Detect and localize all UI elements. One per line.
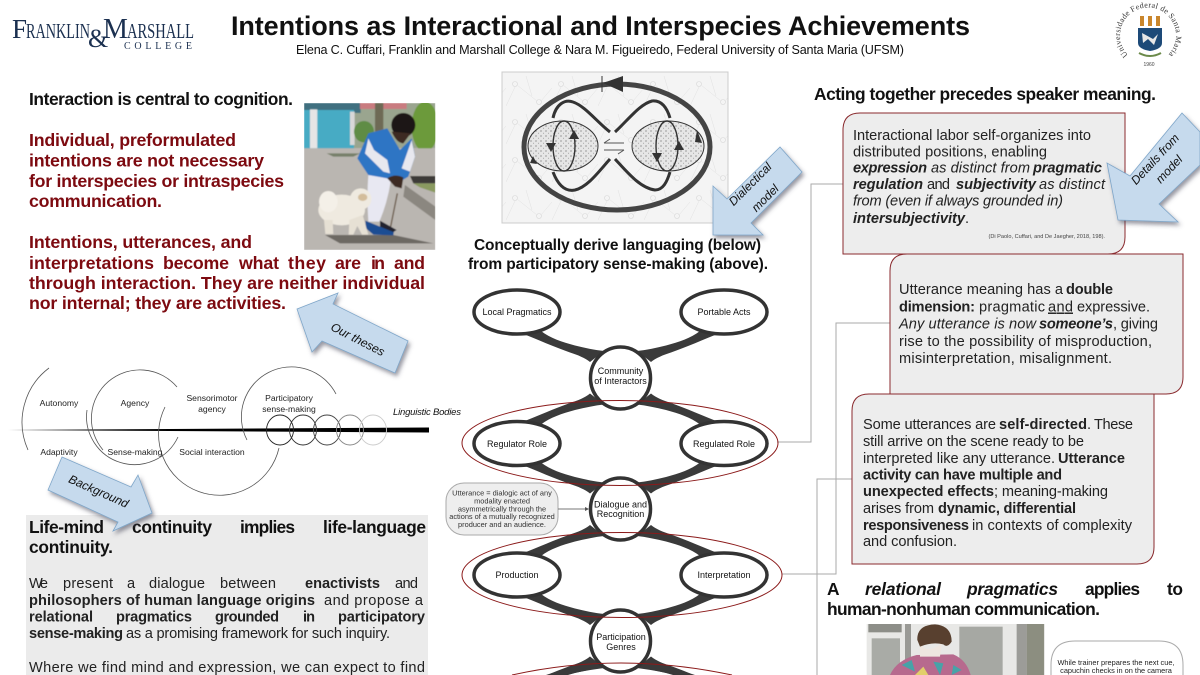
panel: theses text: through interaction. They are neither individual (29, 273, 425, 293)
callout: capuchin: capuchin checks in on the camera (1060, 666, 1173, 675)
arrow: Details from model (1107, 113, 1200, 222)
panel: theses text: for interspecies or intraspecies (29, 171, 284, 191)
diagram: life-mind timeline (8, 367, 461, 495)
panel: self-directed utterances: unexpected effects (863, 484, 994, 500)
callout: utterance definition (446, 483, 589, 535)
heading: relational pragmatics: A (827, 579, 840, 599)
arrow: Our theses (297, 293, 408, 373)
panel: utterance meaning: and (1048, 300, 1073, 316)
panel: background: and (395, 576, 418, 592)
panel: utterance meaning: Utterance meaning has a (899, 282, 1064, 298)
panel: self-directed utterances: Utterance (1058, 451, 1125, 467)
panel: theses text: are (335, 253, 361, 273)
panel: interactional labor: as distinct (1039, 177, 1106, 193)
panel: self-directed utterances (852, 394, 1154, 564)
panel: self-directed utterances: Some utterances are (863, 417, 996, 433)
panel: theses text: become (163, 253, 229, 273)
panel: background: pragmatics (116, 610, 192, 626)
heading: languaging: from participatory sense-making (above). (468, 256, 768, 273)
callout: utterance definition: Utterance = dialogic act of any (452, 488, 552, 498)
panel: self-directed utterances: ; meaning-making (994, 484, 1108, 500)
panel: interactional labor: pragmatic (1032, 160, 1102, 176)
callout: capuchin (1051, 641, 1183, 675)
logo: Universidade Federal de Santa Maria: Universidade Federal de Santa Maria (1116, 2, 1182, 58)
panel: interactional labor: from (even if always grounded in) (853, 194, 1063, 210)
panel: interactional labor: expression (853, 160, 927, 176)
panel: background: enactivists (305, 576, 380, 592)
photo: trainer seen from behind (867, 624, 1045, 675)
panel: background: and propose a (324, 593, 424, 609)
panel: background (26, 515, 428, 675)
panel: utterance meaning: misinterpretation, misalignment. (899, 351, 1112, 367)
panel: theses text: interpretations (29, 253, 154, 273)
panel: theses text: intentions are not necessary (29, 150, 264, 170)
diagram: languaging network (462, 290, 782, 675)
panel: background: relational (29, 610, 93, 626)
panel: self-directed utterances: and confusion. (863, 534, 957, 550)
panel: theses text: Interaction is central to cognition. (29, 89, 293, 109)
panel: background: sense-making (29, 626, 123, 642)
callout: utterance definition: modality enacted (474, 496, 530, 506)
heading: relational pragmatics: pragmatics (966, 579, 1058, 599)
logo: Franklin & Marshall College: M (103, 14, 128, 45)
panel: background: dialogue (149, 576, 205, 592)
panel: interactional labor: regulation (853, 177, 923, 193)
panel: background: between (220, 576, 276, 592)
panel: background: present (63, 576, 113, 592)
arrow: Background (48, 457, 152, 531)
panel: background: We (29, 576, 48, 592)
panel: interactional labor: . (965, 211, 969, 227)
panel: self-directed utterances: interpreted like any utterance. (863, 451, 1055, 467)
diagram: languaging network: Production (495, 570, 539, 580)
logo: Franklin & Marshall College (12, 14, 194, 53)
panel: interactional labor: Interactional labor self-organizes into (853, 128, 1091, 144)
panel: background: implies (240, 517, 295, 537)
diagram: languaging network: Portable Acts (697, 307, 751, 317)
panel: background: philosophers of human language origins (29, 593, 315, 609)
heading: relational pragmatics: relational (865, 579, 942, 599)
panel: background: as a promising framework for such inquiry. (126, 626, 390, 642)
panel: self-directed utterances: arises from (863, 501, 934, 517)
callout: utterance definition: asymmetrically through the (458, 504, 546, 514)
panel: utterance meaning: Any utterance is now (898, 316, 1037, 332)
diagram: life-mind timeline: sense-making (262, 404, 316, 414)
logo: Franklin & Marshall College: ARSHALL (127, 19, 194, 43)
logo: Franklin & Marshall College: COLLEGE (124, 41, 192, 52)
diagram: languaging network: Genres (606, 642, 636, 652)
panel: theses text: and (394, 253, 425, 273)
diagram: life-mind timeline: Adaptivity (40, 447, 78, 457)
panel: theses text: they (288, 253, 326, 273)
logo: Franklin & Marshall College: F (12, 14, 27, 44)
diagram: languaging network: Regulated Role (693, 439, 755, 449)
callout: utterance definition: actions of a mutually recognized (449, 512, 555, 521)
panel: theses text: in (371, 253, 385, 273)
diagram: life-mind timeline: Autonomy (40, 398, 79, 408)
logo: Franklin & Marshall College: RANKLIN (26, 19, 90, 43)
panel: utterance meaning: , giving (1113, 316, 1158, 332)
heading: relational pragmatics (827, 579, 1183, 619)
panel: interactional labor: (Di Paolo, Cuffari, and De Jaegher, 2018, 198). (988, 234, 1105, 240)
logo: Universidade Federal de Santa Maria: 1960 (1143, 62, 1155, 68)
diagram: life-mind timeline: Social interaction (179, 447, 245, 457)
panel: utterance meaning: expressive. (1077, 300, 1150, 316)
panel: self-directed utterances: . These (1087, 417, 1133, 433)
diagram: life-mind timeline: Linguistic Bodies (393, 407, 461, 418)
panel: self-directed utterances: activity can have multiple and (863, 468, 1062, 484)
panel: background: continuity. (29, 537, 113, 557)
panel: self-directed utterances: responsiveness (863, 518, 969, 534)
heading: relational pragmatics: applies (1085, 579, 1140, 599)
arrow: Dialectical model (713, 147, 802, 235)
callout: capuchin: While trainer prepares the next cue, (1057, 658, 1175, 667)
connector lines (777, 184, 890, 675)
diagram: languaging network: Regulator Role (487, 439, 547, 449)
panel: background: continuity (132, 517, 212, 537)
diagram: languaging network: of Interactors (594, 376, 647, 386)
panel: background: Life-mind (29, 517, 104, 537)
diagram: life-mind timeline: Participatory (265, 393, 314, 403)
panel: self-directed utterances: self-directed (999, 417, 1087, 433)
diagram: life-mind timeline: agency (198, 404, 227, 414)
panel: utterance meaning: double (1066, 282, 1113, 298)
panel: utterance meaning: pragmatic (979, 300, 1045, 316)
arrow: Details from model: Details from (1128, 131, 1182, 187)
panel: background: life-language (323, 517, 426, 537)
panel: interactional labor: intersubjectivity (853, 211, 966, 227)
panel: background: grounded (215, 610, 279, 626)
diagram: languaging network: Participation (596, 632, 646, 642)
title: Intentions as Interactional and Interspecies Achievements (231, 11, 970, 41)
panel: interactional labor: distributed positions, enabling (853, 144, 1047, 160)
panel: utterance meaning (890, 254, 1183, 394)
panel: interactional labor: subjectivity (956, 177, 1037, 193)
callout: utterance definition: producer and an audience. (458, 520, 546, 529)
panel: theses text: what (238, 253, 279, 273)
heading: languaging: Conceptually derive languaging (below) (474, 237, 761, 254)
diagram: languaging network: Interpretation (697, 570, 751, 580)
panel: theses text: Individual, preformulated (29, 130, 236, 150)
diagram: dialectical model of participatory sense-making (502, 72, 728, 223)
logo: Franklin & Marshall College: & (88, 24, 108, 53)
panel: utterance meaning: someone’s (1039, 316, 1113, 332)
diagram: life-mind timeline: Sense-making (108, 447, 163, 457)
heading: languaging (468, 237, 768, 273)
panel: self-directed utterances: dynamic, differential (938, 501, 1076, 517)
diagram: life-mind timeline: Agency (121, 398, 150, 408)
heading: acting together: Acting together precedes speaker meaning. (814, 84, 1156, 104)
heading: relational pragmatics: human-nonhuman communication. (827, 599, 1100, 619)
photo: boy with white puppy (304, 102, 438, 250)
panel: background: in (303, 610, 315, 626)
panel: theses text (29, 89, 425, 313)
authors: Elena C. Cuffari, Franklin and Marshall College & Nara M. Figueiredo, Federal University of Santa Maria (UFSM) (296, 43, 904, 57)
diagram: life-mind timeline: Sensorimotor (186, 393, 238, 403)
panel: interactional labor (843, 113, 1125, 254)
panel: self-directed utterances: still arrive on the scene ready to be (863, 434, 1084, 450)
panel: theses text: Intentions, utterances, and (29, 232, 252, 252)
panel: theses text: nor internal; they are activities. (29, 293, 286, 313)
arrow: Dialectical model: Dialectical (726, 160, 775, 208)
arrow: Background: Background (67, 472, 131, 511)
panel: utterance meaning: rise to the possibility of misproduction, (899, 334, 1152, 350)
diagram: languaging network: Recognition (597, 509, 644, 519)
panel: utterance meaning: dimension: (899, 300, 975, 316)
arrow: Dialectical model: model (749, 181, 782, 215)
panel: background: a (127, 576, 136, 592)
diagram: languaging network: Local Pragmatics (482, 307, 552, 317)
panel: interactional labor: as distinct from (931, 160, 1030, 176)
diagram: languaging network: Dialogue and (594, 500, 647, 510)
panel: theses text: communication. (29, 191, 162, 211)
panel: background: participatory (338, 610, 426, 626)
diagram: languaging network: Community (598, 366, 644, 376)
panel: interactional labor: and (927, 177, 950, 193)
arrow: Details from model: model (1153, 152, 1186, 186)
arrow: Our theses: Our theses (328, 320, 387, 359)
heading: relational pragmatics: to (1167, 579, 1183, 599)
panel: self-directed utterances: in contexts of complexity (972, 518, 1133, 534)
